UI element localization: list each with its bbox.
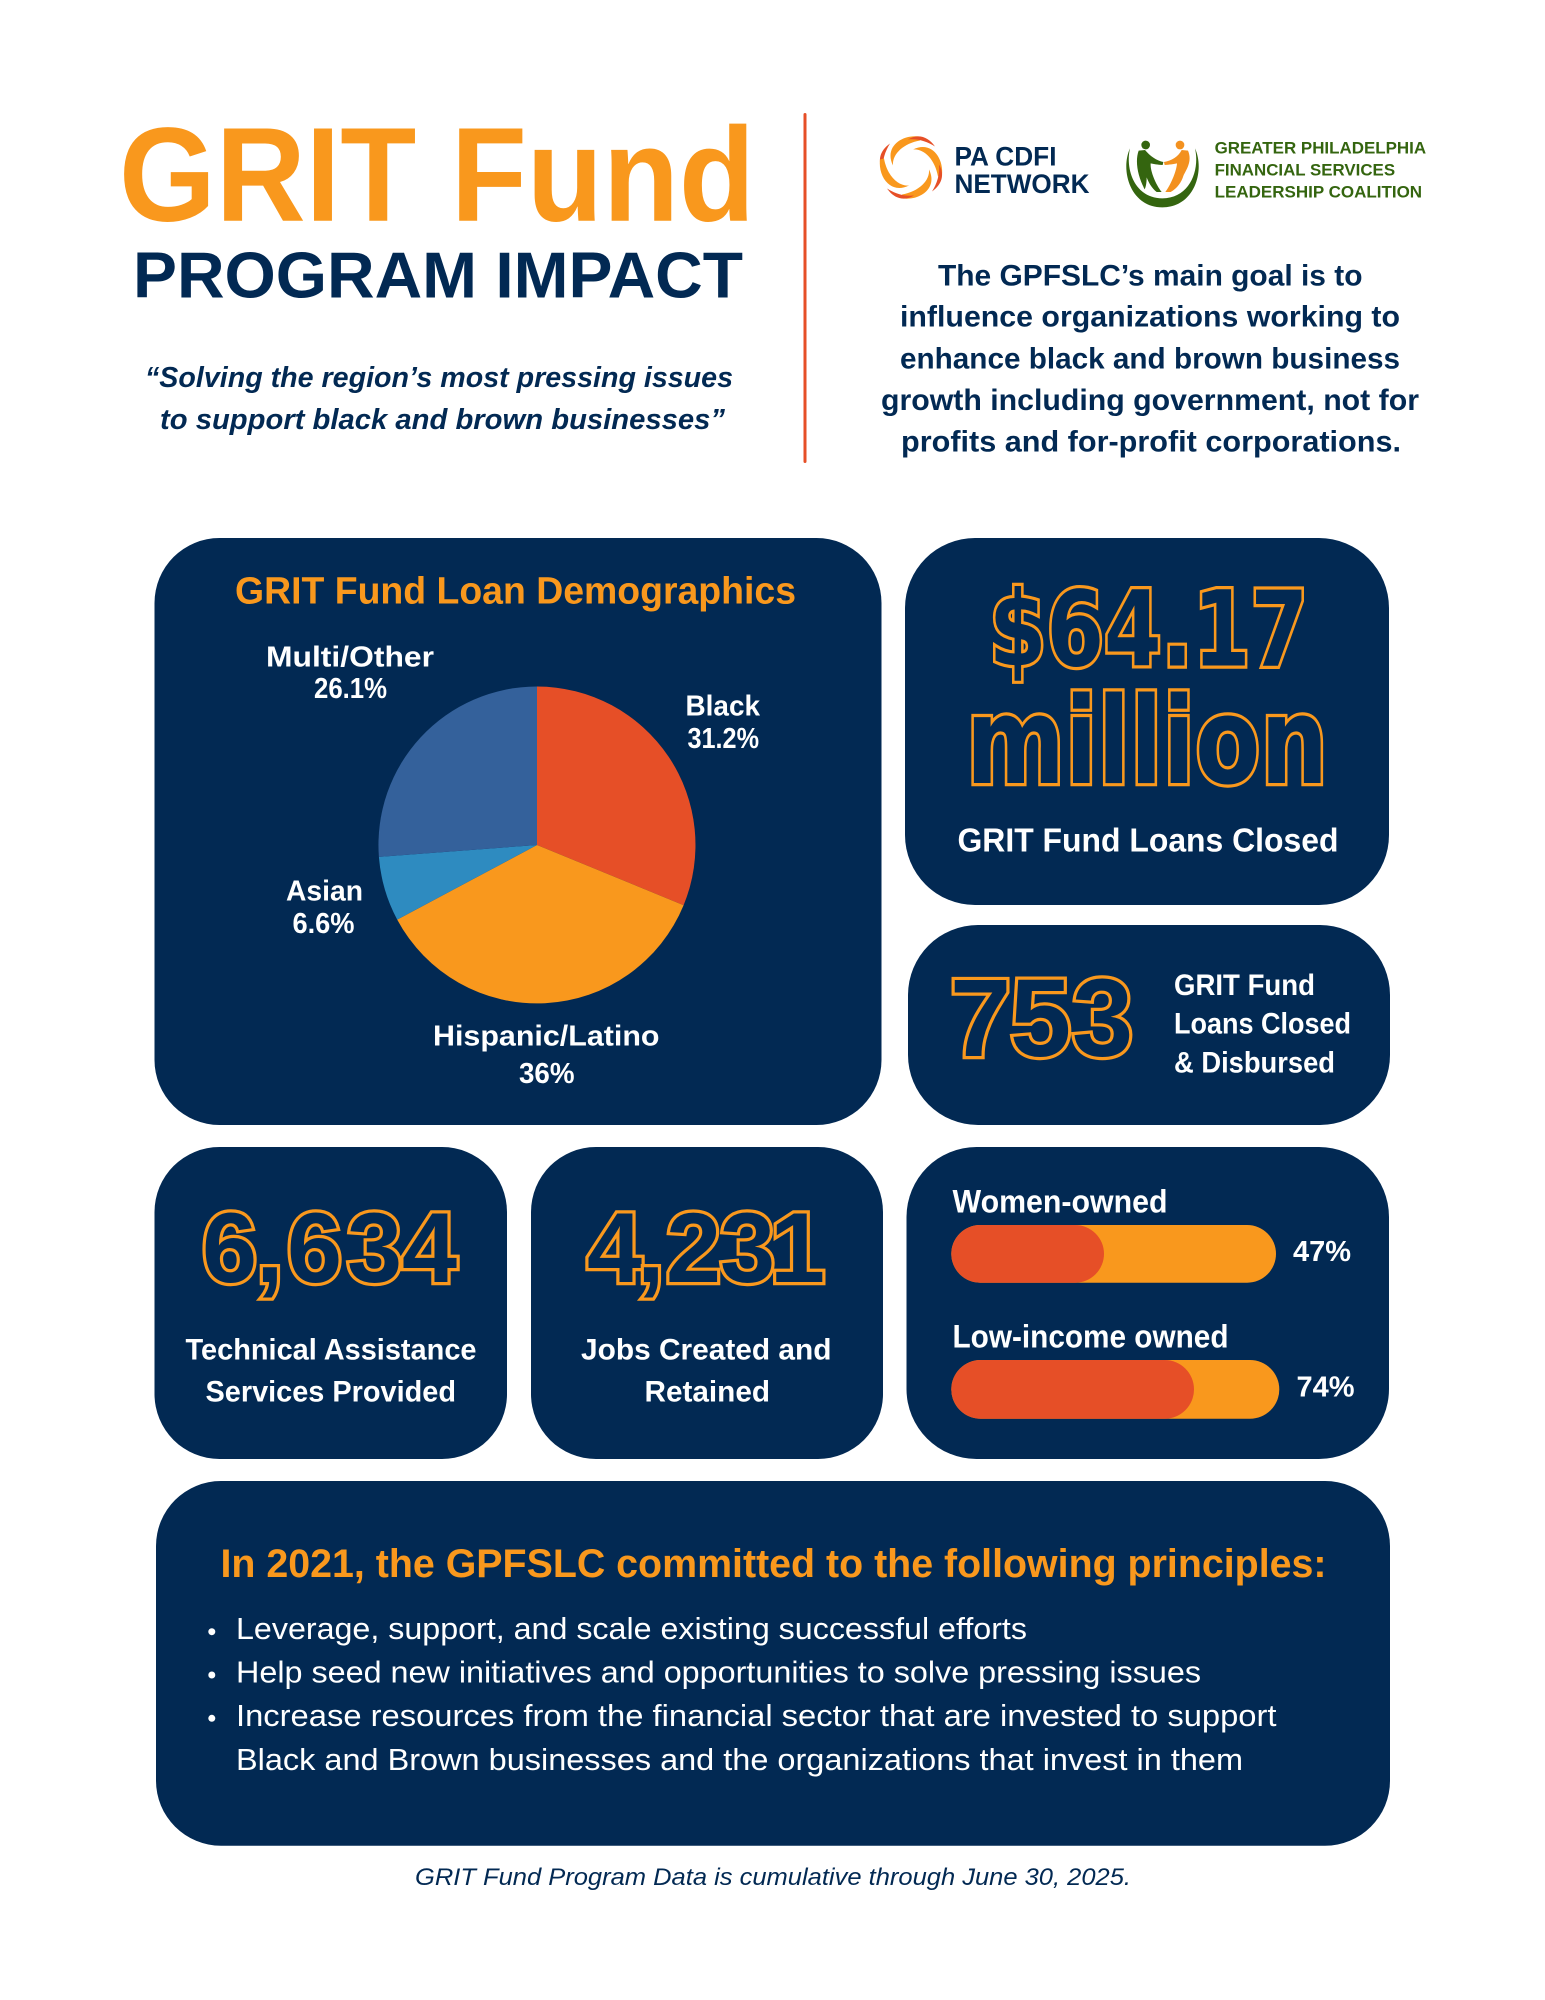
bullet list <box>208 1611 1277 1777</box>
bar chart: women-owned 47% <box>951 1184 1351 1283</box>
tagline quote: to support black and brown businesses” <box>160 404 725 436</box>
pie label: Multi/Other: Multi/Other <box>266 641 434 673</box>
panel: jobs created <box>531 1147 883 1459</box>
header title block <box>119 101 755 436</box>
logo: PA CDFI Network <box>880 136 1090 199</box>
bar chart: low-income owned 74%: Low-income owned <box>952 1319 1228 1355</box>
label: Technical Assistance Services Provided <box>186 1333 476 1409</box>
PA CDFI wordmark: PA CDFI <box>954 141 1056 171</box>
stat: 4,231: 4,231 <box>587 1192 825 1303</box>
bullet list: Black and Brown businesses and the organizations that invest in them <box>236 1742 1243 1777</box>
bullet list: Increase resources from the financial sector that are invested to support <box>236 1698 1277 1733</box>
PA CDFI wordmark: NETWORK <box>954 169 1090 199</box>
heading: demographics: GRIT Fund Loan Demographics <box>235 570 796 612</box>
tagline quote <box>145 362 733 436</box>
icon: PA CDFI swirl <box>880 136 942 199</box>
stat: 6,634: 6,634 <box>202 1192 457 1303</box>
heading: principles: In 2021, the GPFSLC committed to the following principles: <box>220 1542 1326 1586</box>
bar chart: low-income owned 74% <box>951 1319 1355 1419</box>
bar chart: women-owned 47%: Women-owned <box>952 1184 1168 1220</box>
pie label: Black: 31.2% <box>688 723 759 755</box>
stat: $64.17 million: million <box>966 673 1328 812</box>
bullet list: Leverage, support, and scale existing successful efforts <box>236 1611 1027 1646</box>
pie label: Asian: Asian <box>286 876 363 908</box>
panel: ownership bars <box>906 1147 1389 1459</box>
header body text: growth including government, not for <box>881 384 1419 417</box>
footer note: GRIT Fund Program Data is cumulative through June 30, 2025. <box>415 1864 1131 1891</box>
pie label: Multi/Other <box>266 641 434 705</box>
coalition wordmark: LEADERSHIP COALITION <box>1215 184 1422 202</box>
stat: 753: 753 <box>950 957 1133 1080</box>
pie label: Asian <box>286 876 363 940</box>
label: Jobs Created and Retained: Jobs Created and <box>581 1333 832 1366</box>
stat: $64.17 million: $64.17 <box>989 568 1308 690</box>
header body text: influence organizations working to <box>900 301 1400 334</box>
label: GRIT Fund Loans Closed and Disbursed: GRIT Fund <box>1174 969 1315 1002</box>
coalition wordmark <box>1215 139 1426 202</box>
header body text: profits and for-profit corporations. <box>901 426 1401 459</box>
bar chart: women-owned 47%: 47% <box>1293 1236 1351 1268</box>
logo: Greater Philadelphia Financial Services Leadership Coalition <box>1126 139 1426 207</box>
pie label: Hispanic/Latino: 36% <box>519 1058 575 1090</box>
PA CDFI wordmark <box>954 141 1090 199</box>
panel: loans closed amount <box>905 538 1389 905</box>
label: GRIT Fund Loans Closed and Disbursed: Loans Closed <box>1174 1007 1351 1040</box>
title: GRIT Fund: GRIT Fund <box>119 101 755 250</box>
panel: principles <box>156 1481 1390 1846</box>
label: GRIT Fund Loans Closed: GRIT Fund Loans Closed <box>958 821 1338 858</box>
stat: $64.17 million <box>966 568 1328 812</box>
subtitle: PROGRAM IMPACT: PROGRAM IMPACT <box>133 239 743 312</box>
label: GRIT Fund Loans Closed and Disbursed <box>1174 969 1351 1080</box>
tagline quote: “Solving the region’s most pressing issues <box>145 362 733 394</box>
label: GRIT Fund Loans Closed and Disbursed: & Disbursed <box>1174 1046 1335 1080</box>
label: Technical Assistance Services Provided: Technical Assistance <box>186 1333 476 1366</box>
label: Jobs Created and Retained <box>581 1333 832 1409</box>
header body text <box>881 260 1419 459</box>
label: Jobs Created and Retained: Retained <box>644 1376 770 1409</box>
panel: loans disbursed count <box>908 925 1390 1125</box>
coalition wordmark: GREATER PHILADELPHIA <box>1215 139 1426 157</box>
pie label: Black: Black <box>686 690 761 722</box>
bullet list: Help seed new initiatives and opportunities to solve pressing issues <box>236 1655 1201 1690</box>
bar chart: low-income owned 74%: 74% <box>1296 1372 1355 1404</box>
pie label: Asian: 6.6% <box>292 908 355 940</box>
label: Technical Assistance Services Provided: Services Provided <box>206 1376 456 1409</box>
pie label: Hispanic/Latino <box>433 1021 660 1090</box>
vertical header divider <box>804 113 806 463</box>
pie label: Multi/Other: 26.1% <box>314 673 387 705</box>
icon: two figures in crescent <box>1126 141 1199 207</box>
pie label: Black <box>686 690 761 755</box>
pie chart <box>378 686 695 1003</box>
panel: technical assistance <box>154 1147 507 1459</box>
pie label: Hispanic/Latino: Hispanic/Latino <box>433 1021 660 1053</box>
coalition wordmark: FINANCIAL SERVICES <box>1215 162 1395 180</box>
header body text: enhance black and brown business <box>900 342 1400 375</box>
header body text: The GPFSLC’s main goal is to <box>938 260 1362 293</box>
panel: loan demographics <box>154 538 882 1125</box>
